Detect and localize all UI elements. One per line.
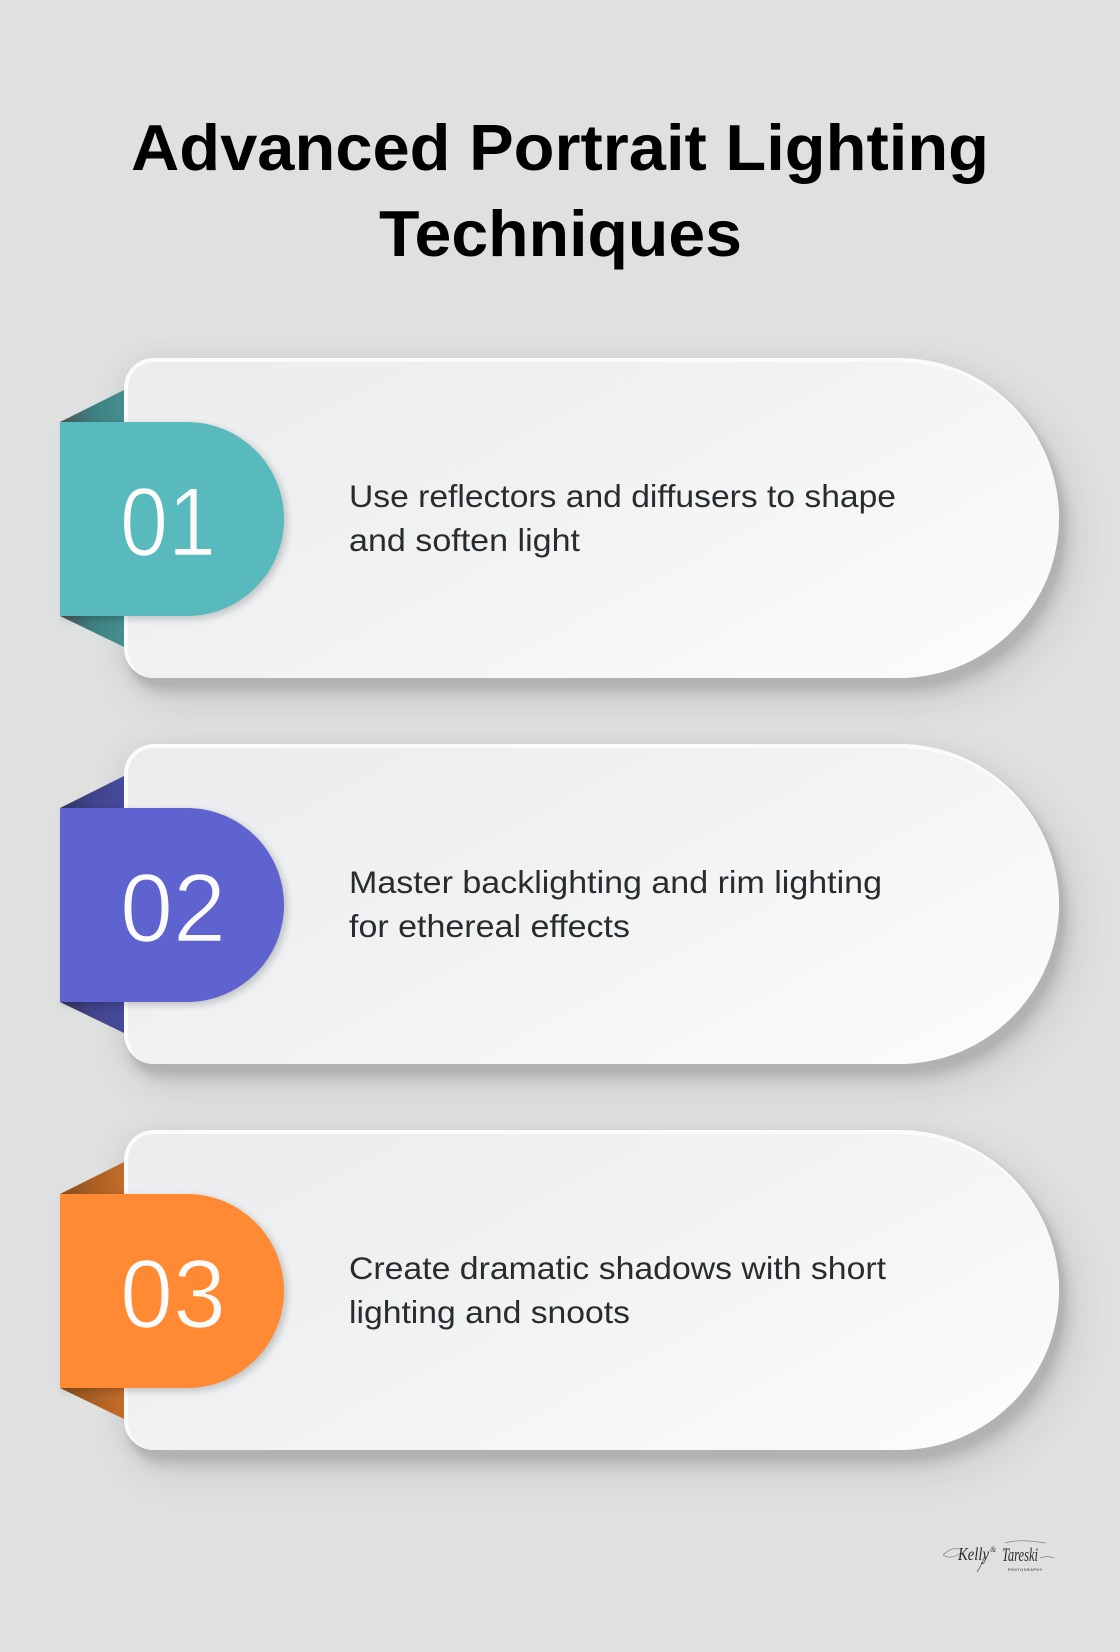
ribbon fold 02 <box>60 776 124 1033</box>
panel: step 01 <box>60 354 1080 706</box>
text 03 <box>120 1240 886 1348</box>
logo: signature: PHOTOGRAPHY <box>1008 1568 1043 1572</box>
text 01 <box>120 468 896 576</box>
number badge 01 <box>60 422 284 616</box>
logo: signature: Tareski <box>1002 1545 1038 1566</box>
text 03: lighting and snoots <box>349 1294 630 1330</box>
text 01: 01 <box>120 468 216 576</box>
number badge 03 <box>60 1194 284 1388</box>
text 01: Use reflectors and diffusers to shape <box>349 478 896 514</box>
text 03: Create dramatic shadows with short <box>349 1250 886 1286</box>
card background 02 <box>124 744 1059 1064</box>
card background 01 <box>124 358 1059 678</box>
title <box>131 111 989 270</box>
panel: step 03 <box>60 1126 1080 1478</box>
text 02: 02 <box>120 854 226 962</box>
title: Advanced Portrait Lighting <box>131 111 989 184</box>
logo: signature <box>942 1540 1054 1572</box>
logo: signature: & <box>990 1545 997 1554</box>
panel: step 02 <box>60 740 1080 1092</box>
number badge 02 <box>60 808 284 1002</box>
text 01: and soften light <box>349 522 580 558</box>
text 03: 03 <box>120 1240 226 1348</box>
ribbon fold 03 <box>60 1162 124 1419</box>
text 02: for ethereal effects <box>349 908 630 944</box>
text 02 <box>120 854 882 962</box>
logo: signature: Kelly <box>957 1544 989 1564</box>
ribbon fold 01 <box>60 390 124 647</box>
card background 03 <box>124 1130 1059 1450</box>
title: Techniques <box>379 197 742 270</box>
text 02: Master backlighting and rim lighting <box>349 864 882 900</box>
